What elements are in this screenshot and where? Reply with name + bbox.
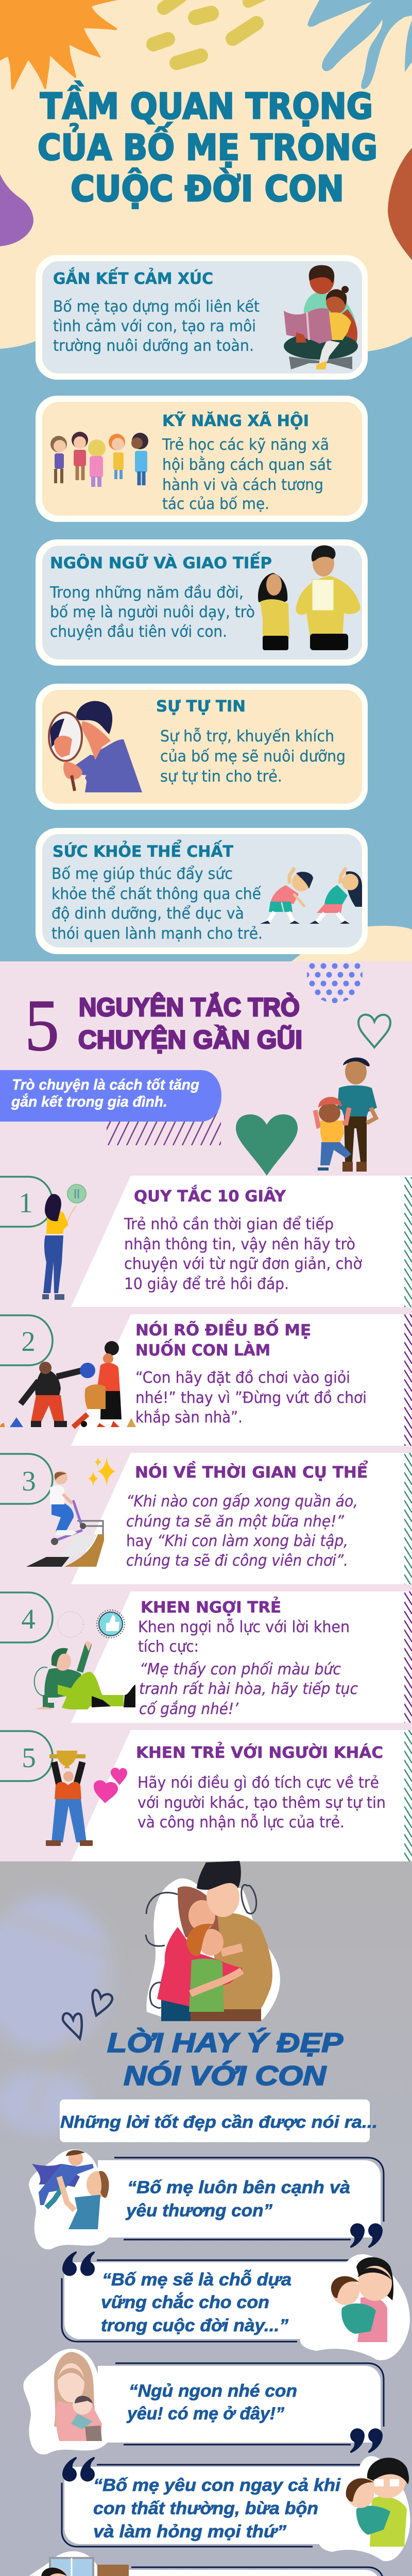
illustration: mother holding child <box>300 2254 410 2360</box>
text block: Trẻ học các kỹ năng xã <box>162 436 329 454</box>
icon: green heart <box>236 1114 298 1176</box>
text block <box>49 584 255 641</box>
text block: sự tự tin cho trẻ. <box>160 768 282 786</box>
heading: QUY TẮC 10 GIÂY <box>134 1185 286 1206</box>
heading: five principles <box>78 993 302 1054</box>
icon: father and daughter signing <box>258 545 360 650</box>
icon: closing quote mark <box>350 2223 383 2248</box>
heading: kind words: LỜI HAY Ý ĐẸP <box>107 2027 344 2058</box>
text block <box>160 727 346 786</box>
heading: NÓI VỀ THỜI GIAN CỤ THỂ <box>135 1461 368 1482</box>
heading: SỰ TỰ TIN <box>156 698 246 716</box>
text block: nhé!” thay vì ”Đừng vứt đồ chơi <box>135 1389 367 1407</box>
quote 5 <box>21 2551 384 2576</box>
icon: woman with pause button <box>42 1184 86 1300</box>
quote 4 text: và làm hỏng mọi thứ” <box>93 2522 286 2541</box>
decoration: purple blob <box>0 174 33 246</box>
icon: opening quote mark <box>62 2457 95 2482</box>
text block: khắp sàn nhà”. <box>135 1409 243 1427</box>
text block: nhận thông tin, vậy nên hãy trò <box>124 1235 355 1253</box>
heading: KỸ NĂNG XÃ HỘI <box>162 411 309 430</box>
icon: person lifting trophy <box>46 1751 93 1846</box>
text block: chuyện đầu tiên với con. <box>50 623 227 641</box>
illustration: hugging family <box>146 1861 280 2021</box>
number badge 5: 5 <box>22 1742 36 1773</box>
callout: conversation strengthens family bonds: Trò chuyện là cách tốt tăng <box>12 1077 199 1093</box>
title <box>38 81 377 210</box>
text block: độ dinh dưỡng, thể dục và <box>52 904 244 923</box>
text block <box>124 1215 363 1293</box>
panel: rule 2 <box>0 1314 412 1446</box>
icon: father and son <box>315 1058 377 1172</box>
subtitle box <box>60 2099 377 2142</box>
text block: tranh rất hài hòa, hãy tiếp tục <box>139 1680 358 1698</box>
illustration: father lifting superhero child <box>29 2149 114 2249</box>
number badge 4: 4 <box>21 1603 36 1635</box>
text block <box>135 1369 367 1427</box>
heading number 5: 5 <box>25 985 59 1066</box>
text block: Sự hỗ trợ, khuyến khích <box>160 727 334 745</box>
text block <box>53 298 260 355</box>
heading: NUỐN CON LÀM <box>135 1338 270 1360</box>
decoration: brown blob <box>388 148 412 260</box>
decoration: hatch lines <box>107 1110 221 1145</box>
text block: trường nuôi dưỡng an toàn. <box>53 337 254 355</box>
text block: của bố mẹ sẽ nuôi dưỡng <box>160 748 346 766</box>
icon: yellow sparkles <box>88 1456 115 1486</box>
text block: bố mẹ là người nuôi dạy, trò <box>50 603 255 621</box>
number badge 1: 1 <box>19 1187 33 1218</box>
panel: physical health <box>36 828 368 954</box>
panel: rule 4 <box>0 1591 412 1723</box>
text block: Trong những năm đầu đời, <box>49 584 244 602</box>
decoration: dot pattern <box>307 963 363 1003</box>
text block: thói quen lành mạnh cho trẻ. <box>52 925 263 943</box>
text block <box>162 436 332 513</box>
text block: tác của bố mẹ. <box>162 495 269 513</box>
heading: five principles: CHUYỆN GẦN GŨI <box>78 1025 302 1054</box>
quote 1 text <box>125 2178 350 2221</box>
quote 4 text: “Bố mẹ yêu con ngay cả khi <box>93 2476 341 2495</box>
text block <box>126 1493 358 1570</box>
icon: five children <box>50 432 148 487</box>
quote 1 <box>29 2149 384 2249</box>
icon: sitting boy waving <box>35 1641 135 1709</box>
callout: conversation strengthens family bonds <box>0 1070 221 1122</box>
panel: emotional bond <box>36 255 368 380</box>
section: five principles background <box>0 961 412 1861</box>
quote 4 text: con thất thường, bừa bộn <box>93 2499 318 2518</box>
heading: NÓI RÕ ĐIỀU BỐ MẸ <box>135 1318 311 1340</box>
icon: opening quote mark <box>62 2251 95 2276</box>
text block: hành vi và cách tương <box>162 476 323 494</box>
panel: confidence <box>36 684 368 810</box>
illustration: mother hugging child <box>23 2349 113 2454</box>
heading: NGÔN NGỮ VÀ GIAO TIẾP <box>50 552 272 572</box>
text block <box>52 865 263 943</box>
quote 1 text: yêu thương con” <box>125 2201 272 2221</box>
text block: 10 giây để trẻ hồi đáp. <box>124 1275 289 1293</box>
quote 2 <box>62 2251 410 2360</box>
panel: language and communication <box>36 539 368 666</box>
panel: rule 3 <box>0 1453 412 1584</box>
text block: “Con hãy đặt đồ chơi vào giỏi <box>135 1369 350 1387</box>
text block <box>138 1618 358 1718</box>
heading: KHEN TRẺ VỚI NGƯỜI KHÁC <box>136 1742 383 1762</box>
icon: navy outline hearts <box>63 1990 112 2039</box>
icon: father reading with daughter <box>284 265 358 369</box>
icon: pink hearts <box>94 1768 127 1803</box>
heading: five principles: NGUYÊN TẮC TRÒ <box>79 993 300 1022</box>
number badge 4 <box>0 1592 53 1642</box>
quote 2 text: vững chắc cho con <box>101 2293 269 2312</box>
text block: hội bằng cách quan sát <box>162 456 332 474</box>
text block: chúng ta sẽ ăn một bữa nhẹ!” <box>126 1513 344 1531</box>
heading: SỨC KHỎE THỂ CHẤT <box>53 840 234 861</box>
panel: social skills <box>36 396 368 522</box>
decoration: blue leaf <box>307 0 412 89</box>
panel: rule 5 <box>0 1730 412 1861</box>
text block: Hãy nói điều gì đó tích cực về trẻ <box>138 1774 379 1792</box>
heading: KHEN NGỢI TRẺ <box>141 1597 281 1617</box>
icon: closing quote mark <box>350 2428 383 2453</box>
text block: Bố mẹ giúp thúc đẩy sức <box>52 865 233 883</box>
text block: chúng ta sẽ đi công viên chơi”. <box>126 1552 348 1570</box>
subtitle box: Những lời tốt đẹp cần được nói ra... <box>60 2112 377 2131</box>
text block: Trẻ nhỏ cần thời gian để tiếp <box>124 1215 334 1233</box>
text block: với người khác, tạo thêm sự tự tin <box>138 1794 386 1812</box>
quote 3 <box>23 2349 384 2454</box>
text block: tình cảm với con, tạo ra môi <box>53 317 256 335</box>
quote 4 text <box>93 2476 341 2541</box>
heading: kind words <box>107 2027 344 2091</box>
illustration: children at home <box>21 2551 129 2576</box>
quote 3 text <box>126 2381 297 2424</box>
heading: GẮN KẾT CẢM XÚC <box>53 267 213 288</box>
decoration: dotted circle <box>58 1612 83 1637</box>
icon: child on scooter and ramp <box>26 1471 104 1567</box>
panel: rule 1 <box>0 1176 412 1307</box>
heading <box>135 1318 311 1360</box>
icon: thumbs-up badge <box>97 1610 125 1638</box>
text block: và công nhận nỗ lực của trẻ. <box>138 1814 345 1832</box>
decoration: orange sun <box>0 0 118 90</box>
number badge 1 <box>0 1177 53 1227</box>
number badge 3 <box>0 1454 53 1504</box>
number badge 2: 2 <box>21 1326 36 1357</box>
number badge 2 <box>0 1315 53 1365</box>
icon: adults picking up toys <box>0 1341 136 1427</box>
icon: green outline heart <box>358 1015 390 1047</box>
icon: man with mirror <box>49 701 142 792</box>
text block: “Mẹ thấy con phối màu bức <box>140 1660 341 1679</box>
quote 4 <box>62 2456 410 2561</box>
icon: two children exercising <box>260 868 362 924</box>
quote 3 text: yêu! có mẹ ở đây!” <box>126 2404 284 2424</box>
illustration: father with glasses holding child <box>318 2456 410 2561</box>
text block: khỏe thể chất thông qua chế <box>52 885 262 903</box>
quote 1 text: “Bố mẹ luôn bên cạnh và <box>127 2178 350 2197</box>
text block: Bố mẹ tạo dựng mối liên kết <box>53 298 260 316</box>
section: kind words background <box>0 1861 412 2576</box>
quote 2 text: trong cuộc đời này...” <box>101 2316 288 2335</box>
title: TẦM QUAN TRỌNG <box>40 81 373 127</box>
quote 2 text <box>101 2270 291 2335</box>
text block: Khen ngợi nỗ lực với lời khen <box>138 1618 350 1636</box>
heading: kind words: NÓI VỚI CON <box>124 2060 327 2091</box>
title: CỦA BỐ MẸ TRONG <box>38 122 377 168</box>
quote 2 text: “Bố mẹ sẽ là chỗ dựa <box>102 2270 291 2290</box>
quote 3 text: “Ngủ ngon nhé con <box>129 2381 297 2401</box>
decoration: yellow blobs <box>153 0 262 63</box>
number badge 3: 3 <box>22 1465 36 1497</box>
text block: chuyện với từ ngữ đơn giản, chờ <box>124 1255 363 1273</box>
text block: cố gắng nhé!’ <box>139 1700 238 1718</box>
section: importance of parents background <box>0 0 412 961</box>
text block: “Khi nào con gấp xong quần áo, <box>126 1493 358 1511</box>
text block: hay “Khi con làm xong bài tập, <box>126 1532 348 1550</box>
callout: conversation strengthens family bonds: gắn kết trong gia đình. <box>11 1093 167 1110</box>
title: CUỘC ĐỜI CON <box>71 167 344 210</box>
text block <box>138 1774 386 1832</box>
text block: tích cực: <box>138 1638 199 1656</box>
number badge 5 <box>0 1731 53 1781</box>
